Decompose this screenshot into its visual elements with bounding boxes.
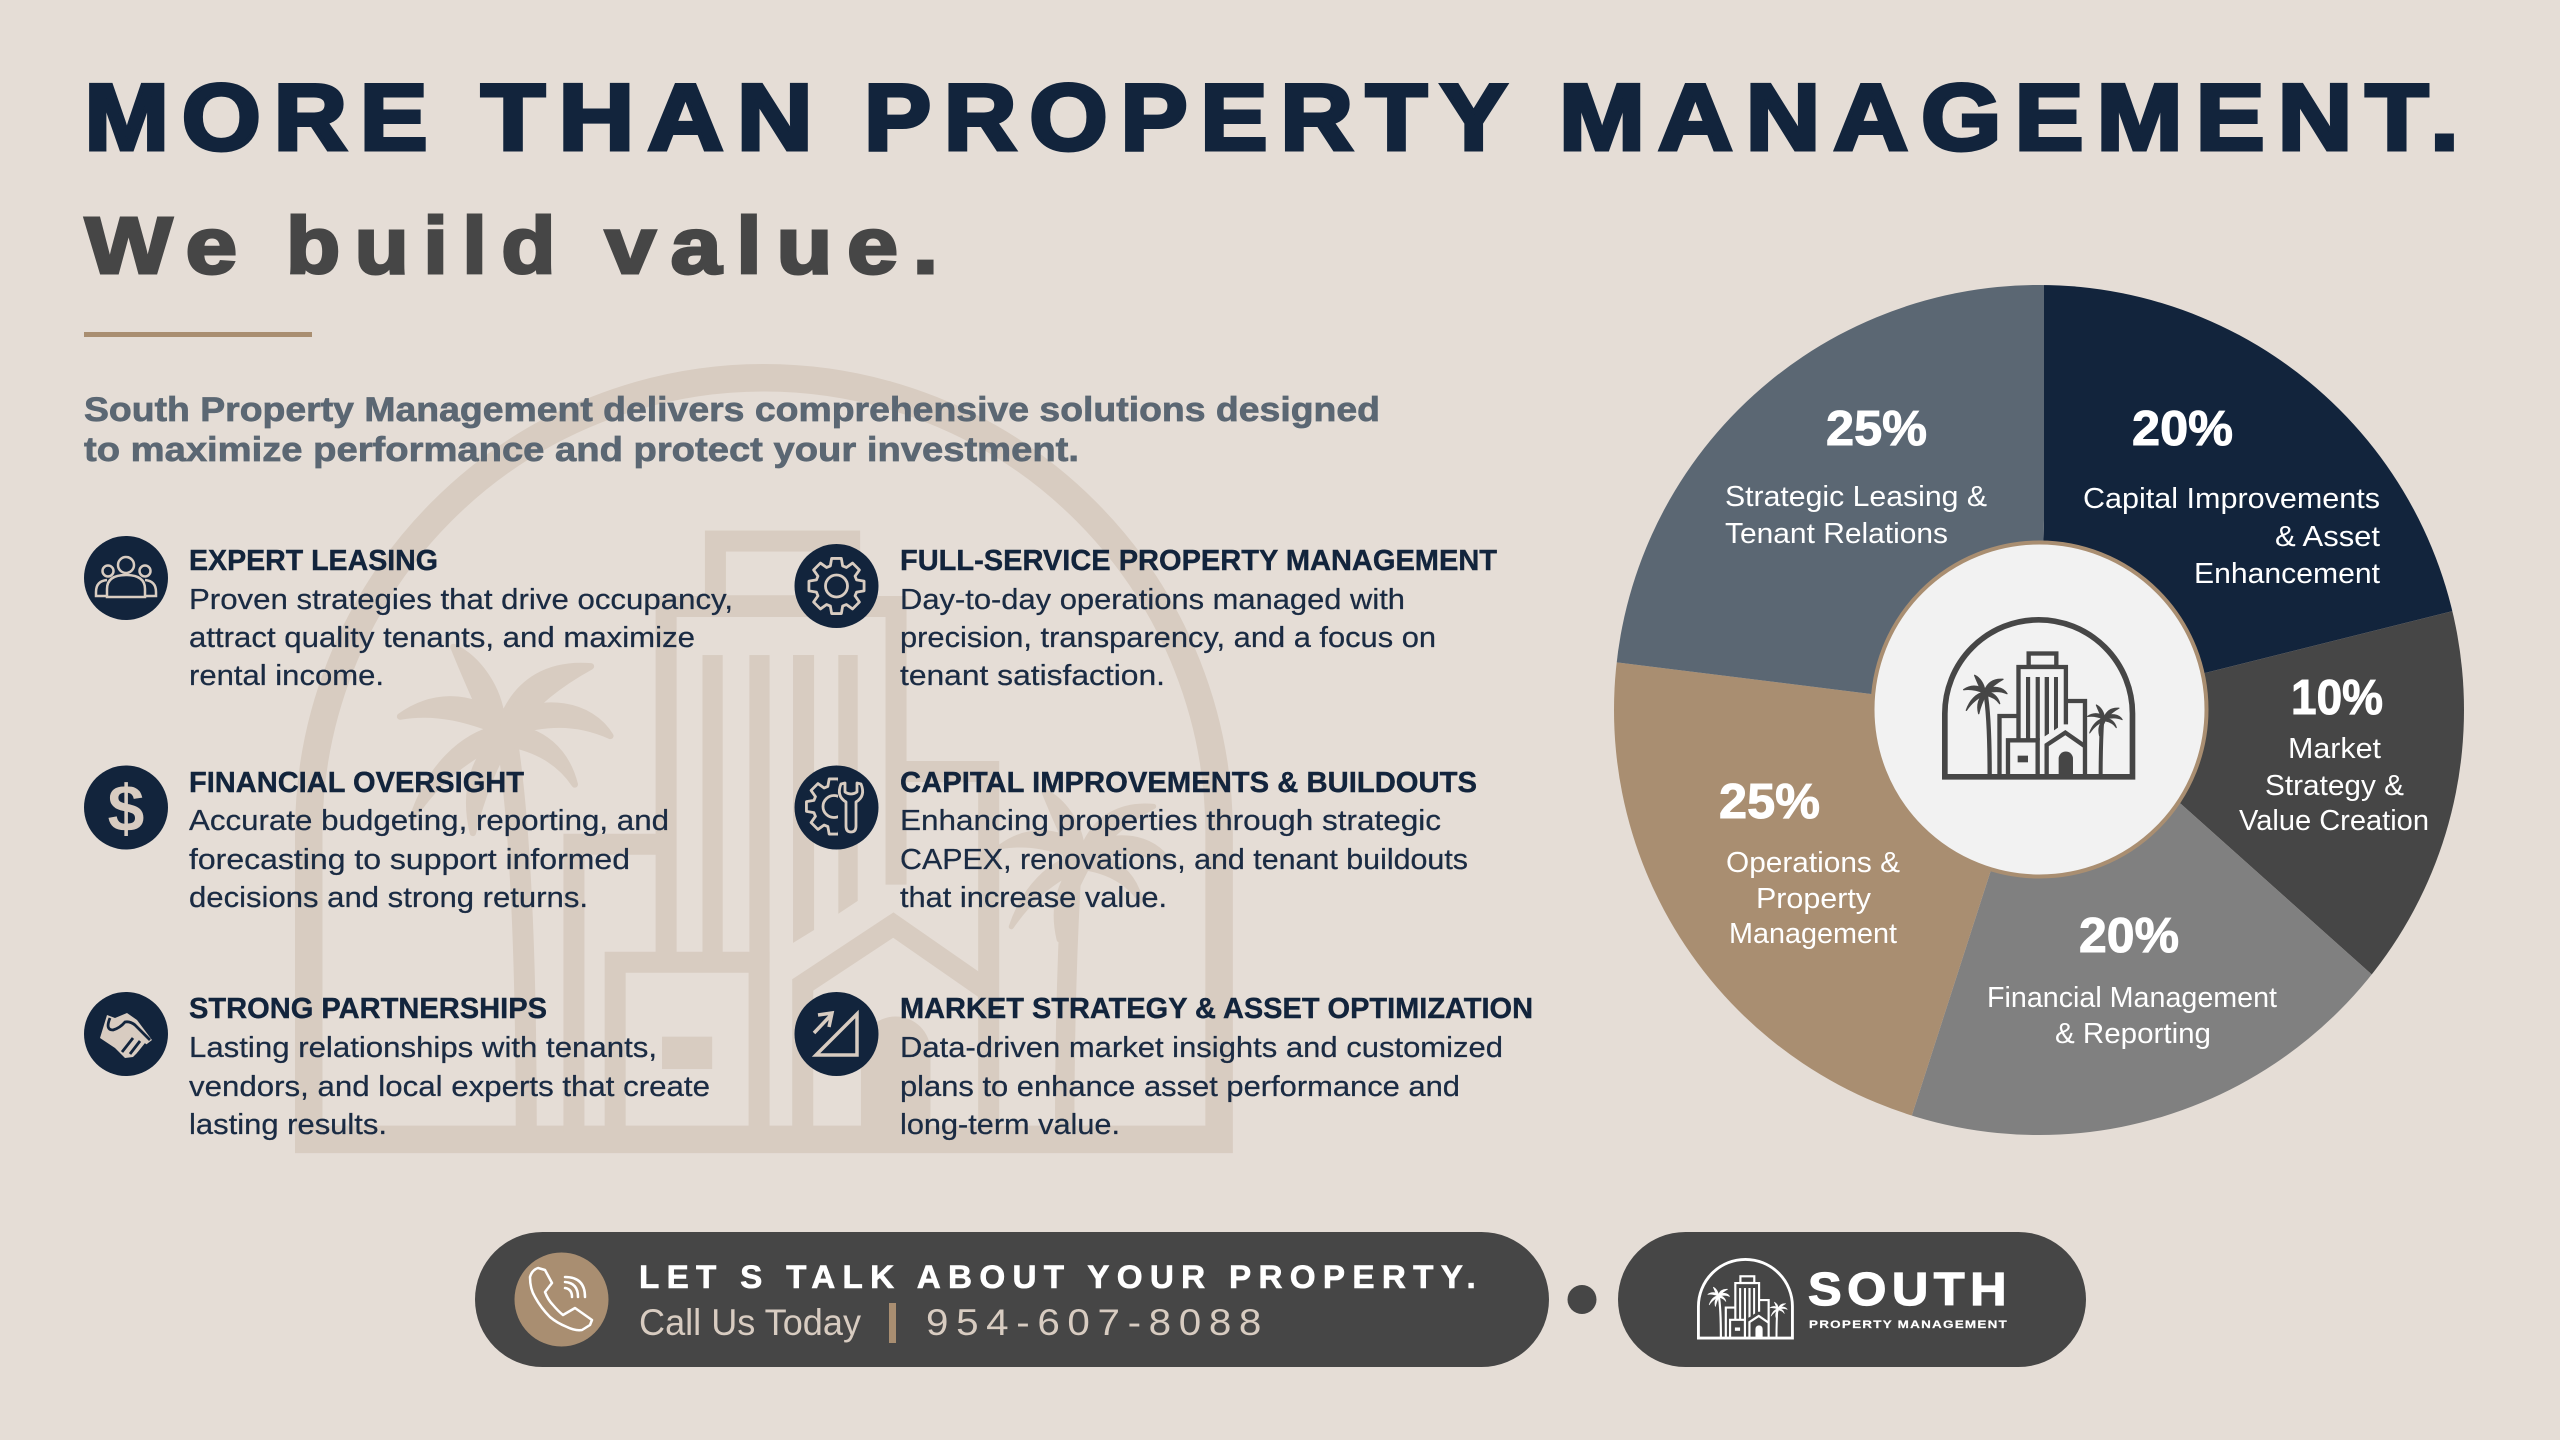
label: strategic leasing: Strategic Leasing & bbox=[1725, 481, 1987, 513]
description: Accurate budgeting, reporting, and bbox=[189, 805, 669, 837]
description: forecasting to support informed bbox=[189, 844, 630, 876]
icon: handshake bbox=[84, 992, 168, 1076]
subtitle bbox=[85, 201, 953, 290]
connector dot bbox=[1568, 1285, 1596, 1314]
description bbox=[900, 805, 1468, 914]
label: market strategy: Strategy & bbox=[2265, 770, 2404, 802]
description bbox=[189, 584, 733, 692]
heading: EXPERT LEASING bbox=[189, 545, 438, 577]
label: market strategy: Market bbox=[2288, 733, 2381, 765]
slice: operations bbox=[1614, 662, 1990, 1116]
call label: Call Us Today bbox=[639, 1302, 861, 1343]
description: plans to enhance asset performance and bbox=[900, 1071, 1460, 1103]
description bbox=[900, 1032, 1503, 1141]
label: operations: Operations & bbox=[1726, 847, 1900, 879]
heading: FINANCIAL OVERSIGHT bbox=[189, 767, 524, 799]
center hole bbox=[1872, 542, 2206, 876]
accent rule bbox=[84, 332, 312, 337]
title: MANAGEMENT. bbox=[1559, 64, 2472, 170]
service: expert leasing bbox=[84, 536, 733, 692]
service: full-service property management bbox=[794, 544, 1497, 692]
label: financial management bbox=[1987, 909, 2277, 1050]
label: financial management: & Reporting bbox=[2055, 1018, 2211, 1050]
brand name: SOUTH bbox=[1808, 1263, 2012, 1315]
label: capital improvements: & Asset bbox=[2275, 521, 2380, 553]
title: PROPERTY bbox=[864, 64, 1520, 170]
description: tenant satisfaction. bbox=[900, 660, 1165, 692]
description: attract quality tenants, and maximize bbox=[189, 622, 695, 654]
label: market strategy: 10% bbox=[2291, 671, 2383, 725]
label: capital improvements: 20% bbox=[2132, 402, 2233, 456]
subtitle: value. bbox=[605, 201, 953, 290]
title: MORE bbox=[84, 64, 440, 170]
label: market strategy: Value Creation bbox=[2239, 805, 2429, 837]
icon: dollar: $ bbox=[108, 771, 144, 845]
heading: STRONG PARTNERSHIPS bbox=[189, 993, 547, 1025]
title bbox=[84, 64, 2472, 170]
description: precision, transparency, and a focus on bbox=[900, 622, 1436, 654]
slice: capital improvements bbox=[2044, 285, 2452, 673]
label: capital improvements: Capital Improvements bbox=[2083, 483, 2380, 515]
service: financial oversight bbox=[84, 766, 669, 914]
description: decisions and strong returns. bbox=[189, 882, 588, 914]
separator bar bbox=[889, 1303, 896, 1343]
description: Day-to-day operations managed with bbox=[900, 584, 1405, 616]
logo pill bbox=[1618, 1232, 2086, 1367]
slice: strategic leasing bbox=[1616, 285, 2044, 694]
brand tagline: PROPERTY MANAGEMENT bbox=[1809, 1319, 2008, 1331]
label: capital improvements bbox=[2083, 402, 2380, 590]
icon: people bbox=[84, 536, 168, 620]
heading: CAPITAL IMPROVEMENTS & BUILDOUTS bbox=[900, 767, 1477, 799]
icon: growth triangle bbox=[794, 992, 878, 1076]
heading: FULL-SERVICE PROPERTY MANAGEMENT bbox=[900, 545, 1497, 577]
description: Enhancing properties through strategic bbox=[900, 805, 1441, 837]
watermark logo bbox=[309, 378, 1219, 1139]
description: vendors, and local experts that create bbox=[189, 1071, 710, 1103]
description bbox=[189, 805, 669, 914]
pie chart bbox=[1614, 285, 2464, 1135]
footer logo mark bbox=[1698, 1259, 1792, 1338]
intro text: to maximize performance and protect your investment. bbox=[84, 431, 1079, 469]
contact heading: LET S TALK ABOUT YOUR PROPERTY. bbox=[639, 1259, 1483, 1295]
slice: financial management bbox=[1912, 804, 2372, 1135]
intro text: South Property Management delivers comprehensive solutions designed bbox=[84, 391, 1380, 429]
label: financial management: Financial Management bbox=[1987, 982, 2277, 1014]
label: operations: 25% bbox=[1719, 775, 1820, 829]
intro text bbox=[84, 391, 1380, 469]
description bbox=[189, 1032, 710, 1141]
icon: dollar bbox=[84, 766, 168, 850]
label: operations: Management bbox=[1729, 918, 1897, 950]
label: market strategy bbox=[2239, 671, 2429, 837]
description: rental income. bbox=[189, 660, 384, 692]
service: capital improvements bbox=[794, 766, 1477, 914]
description: Proven strategies that drive occupancy, bbox=[189, 584, 733, 616]
label: capital improvements: Enhancement bbox=[2194, 558, 2380, 590]
description: Lasting relationships with tenants, bbox=[189, 1032, 657, 1064]
label: strategic leasing: 25% bbox=[1826, 402, 1927, 456]
subtitle: build bbox=[286, 201, 570, 290]
label: operations: Property bbox=[1756, 883, 1872, 915]
description: Data-driven market insights and customized bbox=[900, 1032, 1503, 1064]
label: financial management: 20% bbox=[2079, 909, 2179, 963]
description: long-term value. bbox=[900, 1109, 1120, 1141]
label: strategic leasing: Tenant Relations bbox=[1725, 518, 1948, 550]
icon: gear bbox=[794, 544, 878, 628]
slice: market strategy bbox=[2180, 611, 2464, 974]
subtitle: We bbox=[85, 201, 252, 290]
label: operations bbox=[1719, 775, 1900, 950]
service: strong partnerships bbox=[84, 992, 710, 1141]
description bbox=[900, 584, 1436, 692]
description: that increase value. bbox=[900, 882, 1167, 914]
icon: gear and wrench bbox=[794, 766, 878, 850]
description: lasting results. bbox=[189, 1109, 387, 1141]
center logo bbox=[1945, 620, 2132, 777]
icon: phone bbox=[514, 1252, 608, 1346]
title: THAN bbox=[481, 64, 826, 170]
pie slices bbox=[1614, 285, 2464, 1135]
phone number: 954-607-8088 bbox=[926, 1302, 1269, 1343]
contact pill bbox=[475, 1232, 1549, 1367]
heading: MARKET STRATEGY & ASSET OPTIMIZATION bbox=[900, 993, 1533, 1025]
description: CAPEX, renovations, and tenant buildouts bbox=[900, 844, 1468, 876]
label: strategic leasing bbox=[1725, 402, 1987, 550]
service: market strategy bbox=[794, 992, 1533, 1141]
